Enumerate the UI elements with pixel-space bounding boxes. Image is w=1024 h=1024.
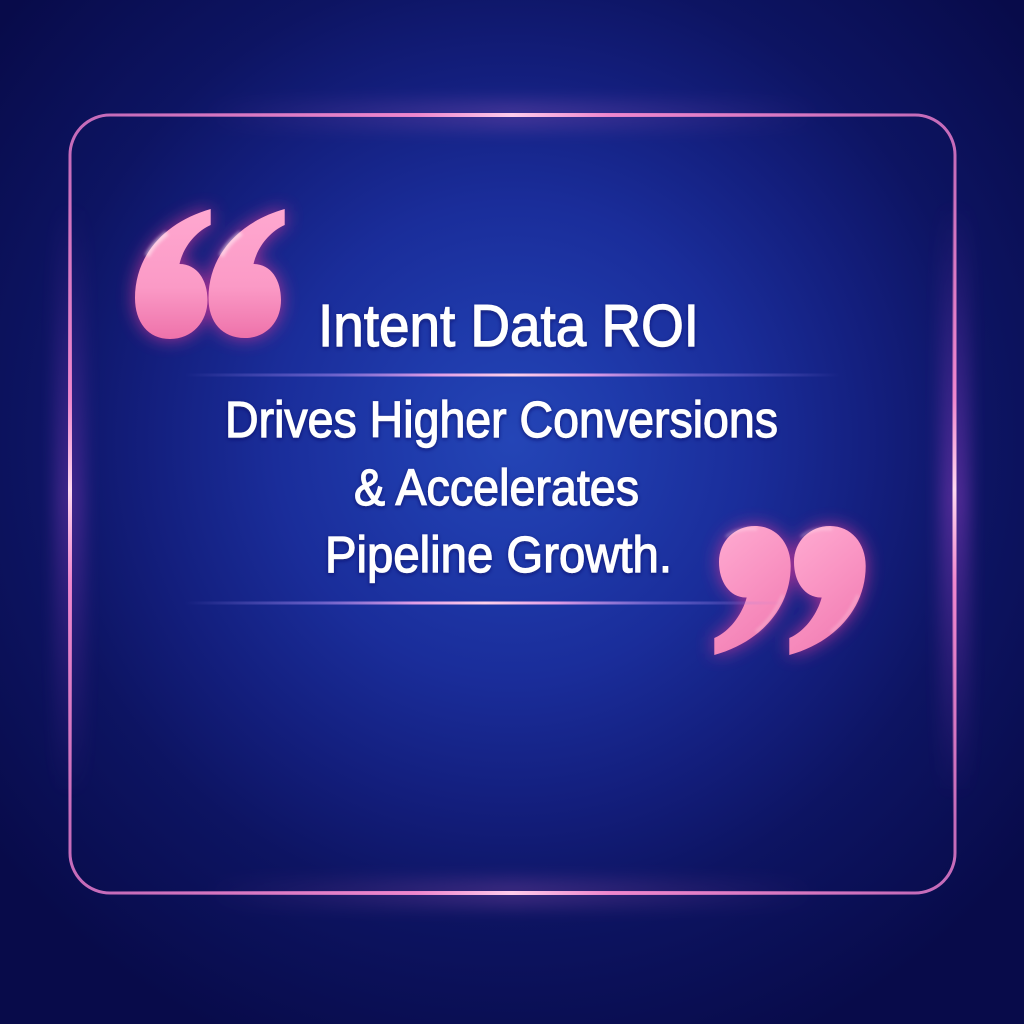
text block: quote body: Pipeline Growth. xyxy=(325,526,672,583)
icon: closing quotation mark xyxy=(714,526,866,655)
divider: bottom xyxy=(185,602,785,604)
divider: top xyxy=(185,374,840,376)
panel: rounded quote frame xyxy=(55,100,970,908)
text block: quote body xyxy=(225,391,778,583)
text block: quote body: Drives Higher Conversions xyxy=(225,391,778,448)
text block: quote body: & Accelerates xyxy=(354,459,639,516)
heading: Intent Data ROI xyxy=(318,293,699,359)
icon: opening quotation mark xyxy=(135,209,285,339)
